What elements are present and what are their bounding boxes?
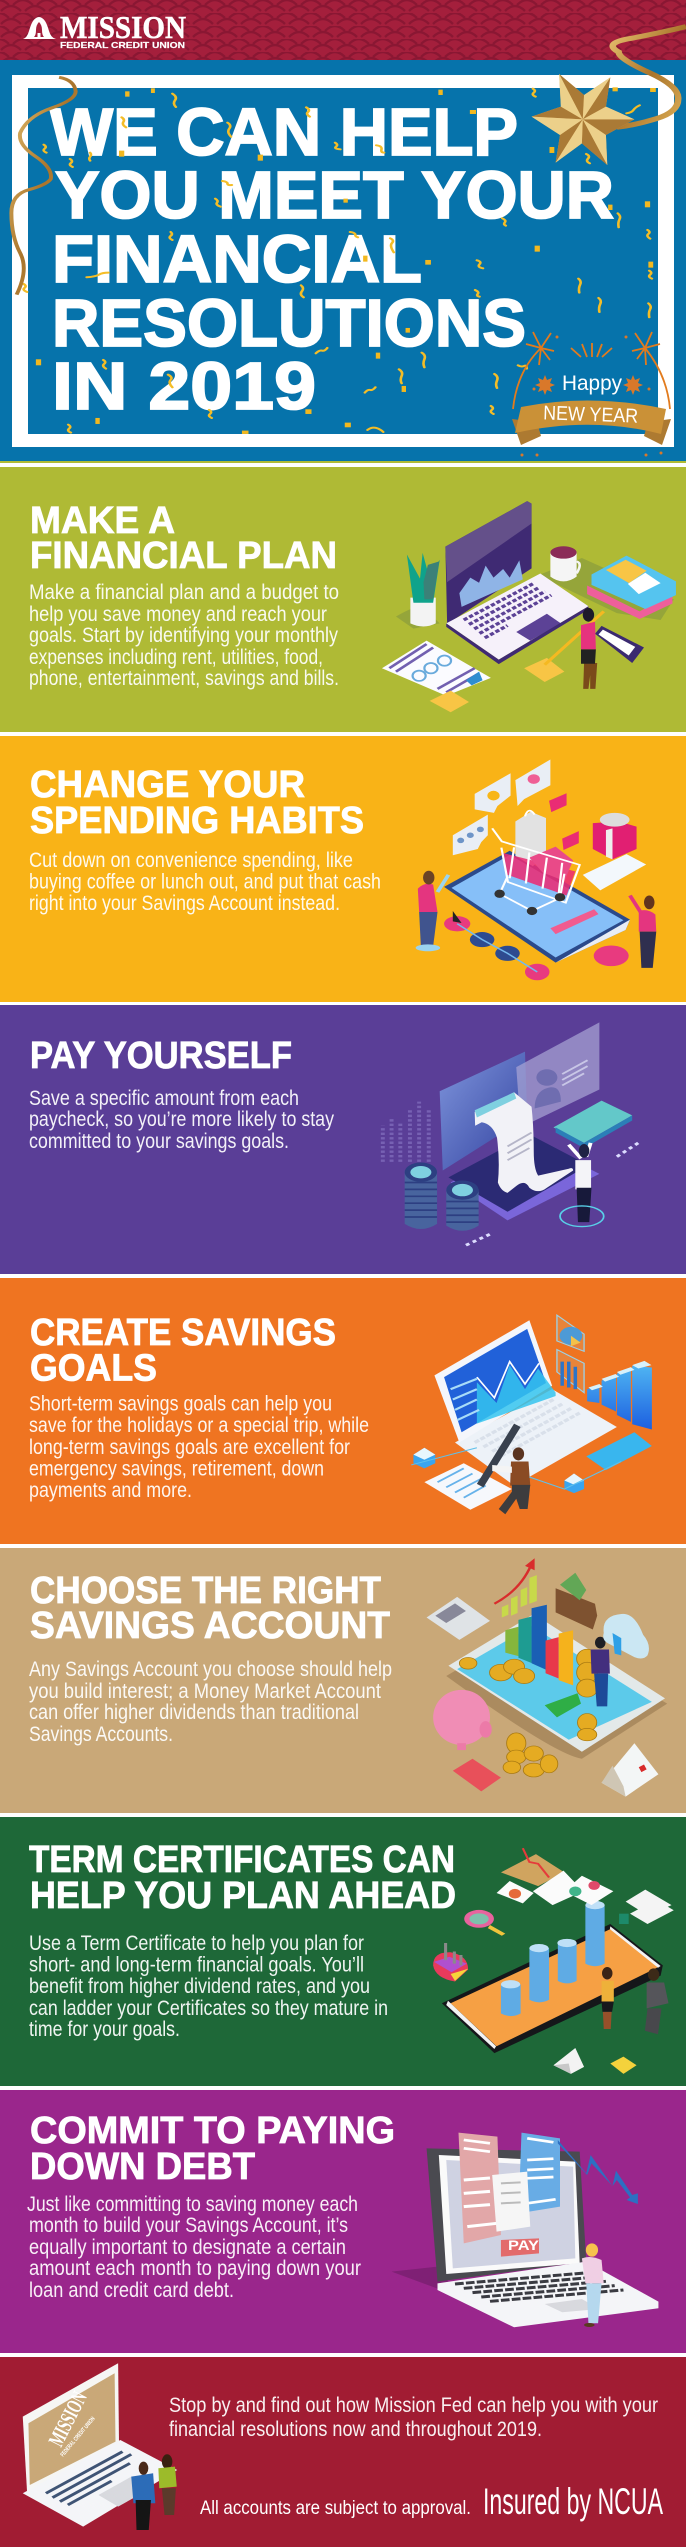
- body text: Short-term savings goals can help you: [29, 1392, 332, 1416]
- badge: Happy New Year: [512, 332, 671, 456]
- heading: FINANCIAL PLAN: [30, 535, 337, 577]
- illustration: laptop with logo and two people: [23, 2363, 177, 2530]
- illustration: phone, bar chart, piggy bank, coins: [427, 1558, 667, 1797]
- body text: buying coffee or lunch out, and put that cash: [29, 870, 381, 894]
- confetti: [24, 87, 656, 434]
- sparkles: [520, 336, 662, 456]
- body text: Cut down on convenience spending, like: [29, 849, 353, 872]
- label: PAY: PAY: [508, 2237, 540, 2253]
- heading: HELP YOU PLAN AHEAD: [30, 1875, 456, 1917]
- panel: header band: [0, 0, 686, 60]
- call to action text: [169, 2394, 658, 2441]
- heading: GOALS: [30, 1348, 157, 1390]
- heading: CHANGE YOUR: [30, 764, 305, 806]
- body text: Save a specific amount from each: [29, 1087, 299, 1110]
- heading: CREATE SAVINGS: [30, 1312, 336, 1354]
- fireworks: [513, 332, 670, 409]
- heading: SPENDING HABITS: [30, 800, 364, 842]
- title: WE CAN HELP: [50, 95, 518, 170]
- body text: expenses including rent, utilities, food,: [29, 646, 323, 669]
- body text: time for your goals.: [29, 2018, 180, 2041]
- screen logo subtitle: FEDERAL CREDIT UNION: [60, 2416, 97, 2458]
- body text: goals. Start by identifying your monthly: [29, 624, 338, 647]
- body text: phone, entertainment, savings and bills.: [29, 667, 339, 690]
- body text: can ladder your Certificates so they mature in: [29, 1997, 388, 2020]
- panel: title background: [0, 60, 686, 463]
- illustration: phone with bars and charts: [433, 1848, 674, 2074]
- heading: CHOOSE THE RIGHT: [30, 1570, 381, 1612]
- body text: month to build your Savings Account, it’s: [29, 2214, 348, 2237]
- body text: [29, 849, 381, 915]
- body text: [29, 1087, 334, 1153]
- heading: TERM CERTIFICATES CAN: [29, 1839, 455, 1881]
- ribbon banner: [515, 400, 666, 434]
- body text: can offer higher dividends than traditional: [29, 1701, 359, 1724]
- heading: COMMIT TO PAYING: [30, 2110, 395, 2152]
- logo: Mission Federal Credit Union: [23, 9, 186, 50]
- panel: make a financial plan: [0, 467, 686, 732]
- panel: footer: [0, 2357, 686, 2547]
- body text: [29, 581, 339, 690]
- body text: loan and credit card debt.: [29, 2279, 234, 2302]
- body text: you build interest; a Money Market Account: [29, 1680, 381, 1703]
- body text: payments and more.: [29, 1479, 192, 1502]
- icon: mission bell arch: [23, 17, 56, 39]
- body text: long-term savings goals are excellent for: [29, 1436, 350, 1459]
- panel: change your spending habits: [0, 736, 686, 1002]
- ribbon: left gold streamer: [11, 77, 76, 295]
- body text: paycheck, so you’re more likely to stay: [29, 1108, 334, 1131]
- body text: help you save money and reach your: [29, 603, 327, 626]
- body text: right into your Savings Account instead.: [29, 892, 340, 915]
- heading: [30, 2110, 395, 2188]
- body text: Use a Term Certificate to help you plan for: [29, 1932, 364, 1955]
- ribbon: right gold streamer: [613, 27, 686, 127]
- body text: save for the holidays or a special trip, while: [29, 1414, 369, 1437]
- banner text: NEW YEAR: [543, 402, 639, 428]
- panel: create savings goals: [0, 1278, 686, 1544]
- body text: [27, 2193, 361, 2302]
- body text: Just like committing to saving money each: [27, 2193, 358, 2216]
- illustration: laptop with bills and falling arrow: [392, 2133, 658, 2327]
- heading: PAY YOURSELF: [30, 1035, 292, 1077]
- body text: benefit from higher dividend rates, and you: [29, 1975, 370, 1998]
- body text: Make a financial plan and a budget to: [29, 581, 339, 604]
- illustration: laptop, plant, books, papers: [382, 501, 676, 712]
- illustration: laptop, receipt, credit card, coins: [383, 1022, 641, 1245]
- logo wordmark: MISSION: [60, 9, 186, 45]
- call to action text: financial resolutions now and throughout 2019.: [169, 2418, 542, 2441]
- heading: [30, 764, 364, 842]
- body text: [29, 1932, 388, 2041]
- heading: DOWN DEBT: [30, 2146, 255, 2188]
- body text: Savings Accounts.: [29, 1723, 173, 1746]
- panel: choose the right savings account: [0, 1548, 686, 1813]
- greeting: Happy: [562, 372, 622, 395]
- body text: [29, 1658, 392, 1746]
- panel: commit to paying down debt: [0, 2090, 686, 2353]
- screen logo: MISSION: [43, 2387, 92, 2450]
- disclaimer: All accounts are subject to approval.: [200, 2498, 471, 2519]
- body text: amount each month to paying down your: [29, 2257, 361, 2280]
- illustration: laptop chart and bar columns: [411, 1315, 652, 1514]
- panel: pay yourself: [0, 1005, 686, 1274]
- title: [50, 95, 614, 424]
- panel: term certificates: [0, 1817, 686, 2086]
- icon: gold star: [532, 74, 634, 165]
- illustration: phone, shopping cart, shoppers: [416, 759, 656, 980]
- body text: Any Savings Account you choose should help: [29, 1658, 392, 1681]
- title: FINANCIAL: [52, 222, 422, 297]
- ribbon tails: [512, 419, 671, 445]
- heading: [29, 1839, 456, 1917]
- body text: short- and long-term financial goals. You’ll: [29, 1954, 364, 1976]
- heading: [30, 1312, 336, 1390]
- heading: [30, 1570, 390, 1647]
- body text: equally important to designate a certain: [29, 2236, 346, 2259]
- title: YOU MEET YOUR: [55, 158, 614, 233]
- body text: [29, 1392, 369, 1502]
- heading: MAKE A: [30, 500, 175, 542]
- heading: SAVINGS ACCOUNT: [30, 1605, 390, 1647]
- logo subtitle: FEDERAL CREDIT UNION: [60, 40, 185, 50]
- title: IN 2019: [52, 349, 316, 424]
- body text: emergency savings, retirement, down: [29, 1458, 324, 1480]
- body text: committed to your savings goals.: [29, 1130, 289, 1153]
- title: RESOLUTIONS: [52, 286, 526, 361]
- heading: [30, 500, 337, 577]
